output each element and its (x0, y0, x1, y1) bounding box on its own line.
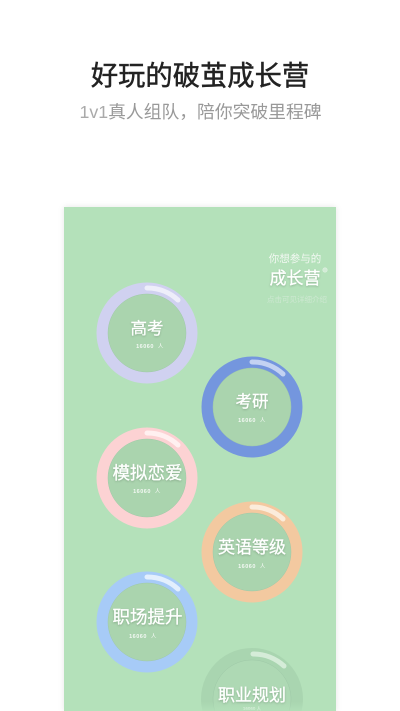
ring: 职场提升: 16060 人 (129, 633, 157, 640)
subtitle: 1v1真人组队，陪你突破里程碑 (79, 102, 322, 122)
panel heading (267, 252, 327, 304)
ring: 高考: 16060 人 (136, 343, 164, 350)
panel heading: 成长营 (270, 269, 320, 288)
panel heading: 你想参与的 (269, 252, 321, 265)
ring: 职业规划: 16060 人 (243, 706, 262, 711)
ring: 高考: 高考 (130, 319, 164, 338)
ring: 考研: 16060 人 (238, 417, 266, 424)
ring: 职场提升: 职场提升 (112, 607, 182, 627)
ring: 模拟恋爱: 模拟恋爱 (112, 463, 182, 483)
ring: 英语等级: 16060 人 (238, 563, 266, 570)
title: 好玩的破茧成长营 (91, 60, 309, 91)
ring: 英语等级 (202, 502, 302, 602)
ring: 模拟恋爱 (96, 428, 198, 528)
panel heading: 点击可见详细介绍 (267, 294, 327, 304)
panel: app screen (64, 207, 336, 711)
ring: 模拟恋爱: 16060 人 (133, 488, 161, 495)
ring: 职业规划: 职业规划 (218, 686, 286, 705)
ring: 考研 (202, 356, 302, 458)
ring: 考研: 考研 (236, 392, 268, 411)
ring: 英语等级: 英语等级 (218, 538, 286, 557)
ring: 高考 (96, 282, 198, 384)
ring: 职业规划 (201, 648, 303, 711)
ring: 职场提升 (96, 572, 198, 672)
